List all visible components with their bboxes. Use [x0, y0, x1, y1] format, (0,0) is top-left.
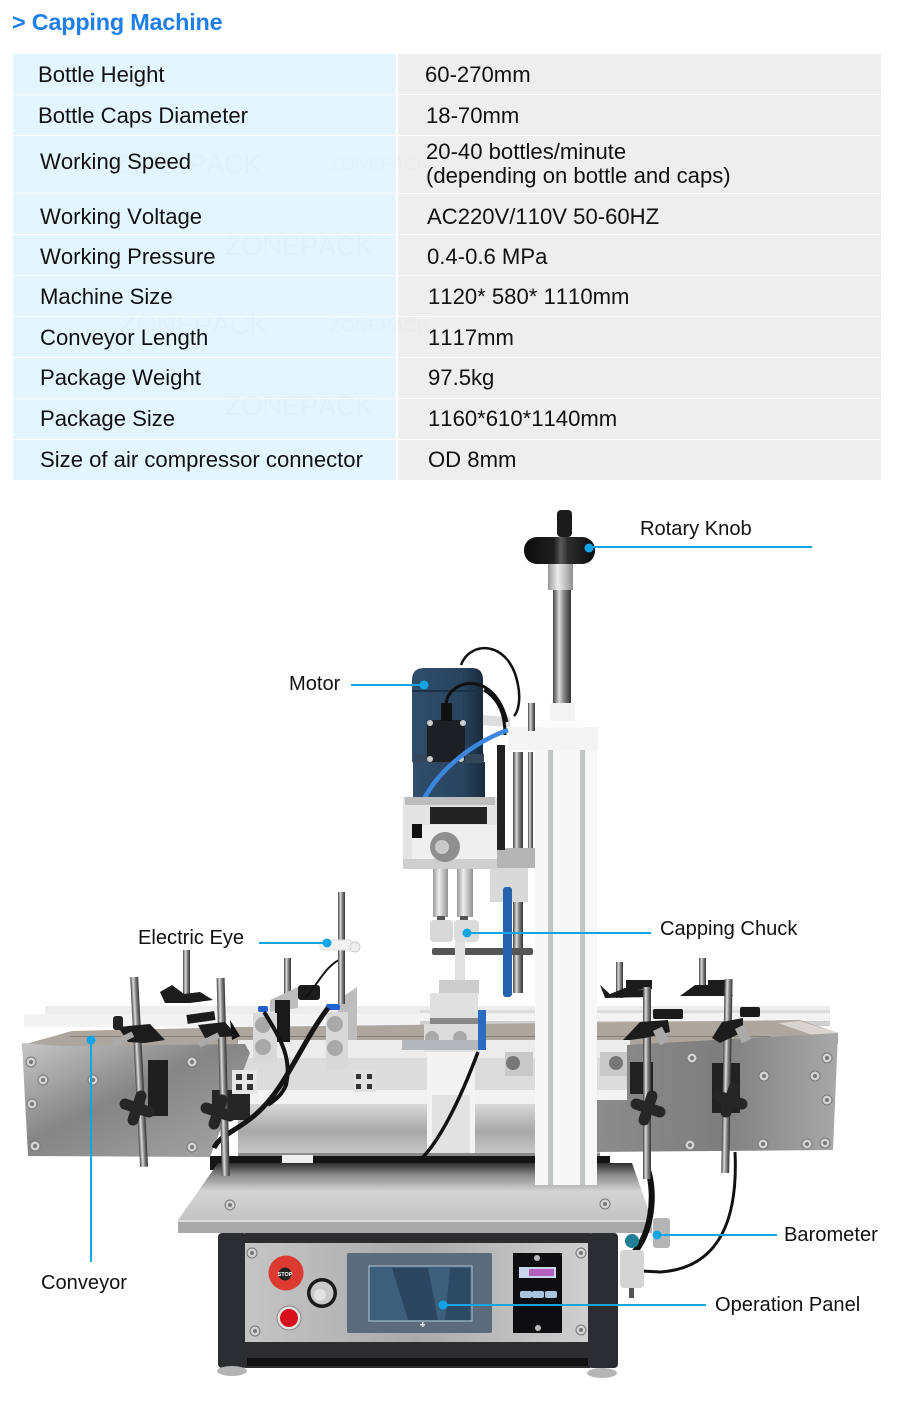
callout: barometer	[652, 1224, 878, 1246]
conveyor belt surface	[22, 1020, 838, 1050]
callout: conveyor: Conveyor	[41, 1272, 127, 1294]
table top	[178, 1163, 652, 1233]
row: working pressure: 0.4-0.6 MPa	[427, 244, 547, 269]
row: machine size: 1120* 580* 1110mm	[428, 284, 629, 309]
motor	[412, 668, 485, 798]
right conveyor side plate	[597, 1033, 838, 1152]
row: working speed: 20-40 bottles/minute	[426, 139, 626, 164]
row: air compressor connector: Size of air compressor connector	[40, 447, 363, 472]
watermark: ZONEPACK	[330, 316, 429, 336]
emergency stop button	[268, 1256, 304, 1290]
row: working speed	[13, 136, 881, 193]
row: package size: Package Size	[40, 406, 175, 431]
row: working pressure	[13, 235, 881, 275]
operation panel	[245, 1243, 588, 1342]
callout: electric eye: Electric Eye	[138, 927, 244, 949]
callout: rotary knob	[584, 518, 812, 552]
callout: barometer: Barometer	[784, 1224, 878, 1246]
back posts and clamps	[160, 950, 733, 1003]
row: bottle caps diameter: 18-70mm	[426, 103, 519, 128]
row: bottle caps diameter: Bottle Caps Diameter	[38, 103, 248, 128]
left adjustable posts	[112, 977, 240, 1176]
title: > Capping Machine	[12, 9, 222, 35]
callout: capping chuck: Capping Chuck	[660, 918, 798, 940]
specification table	[13, 54, 881, 480]
row: package weight: 97.5kg	[428, 365, 494, 390]
back conveyor rails	[24, 1006, 830, 1027]
row: working voltage	[13, 194, 881, 234]
callout: motor	[289, 673, 428, 695]
row: conveyor length: 1117mm	[428, 325, 514, 350]
row: bottle height: Bottle Height	[38, 62, 164, 87]
row: conveyor length	[13, 317, 881, 357]
central conveyor frame	[238, 1040, 630, 1160]
cabinet	[217, 1233, 618, 1378]
callout: operation panel: Operation Panel	[715, 1294, 860, 1316]
watermark: ZONEPACK	[330, 154, 429, 174]
row: working voltage: AC220V/110V 50-60HZ	[427, 204, 659, 229]
watermark: ZONEPACK	[225, 391, 374, 421]
speed dial	[307, 1278, 337, 1308]
air hoses	[214, 958, 343, 1148]
row: working speed: (depending on bottle and caps)	[426, 163, 731, 188]
row: air compressor connector	[13, 440, 881, 480]
watermark: ZONEPACK	[119, 310, 268, 340]
callout: electric eye	[138, 927, 332, 949]
row: package weight: Package Weight	[40, 365, 201, 390]
callout: capping chuck	[462, 918, 798, 940]
guide rods	[432, 703, 535, 997]
barometer and filter	[620, 1152, 735, 1298]
centre bottle guide block	[402, 980, 486, 1158]
motor cables	[416, 648, 519, 825]
row: machine size	[13, 276, 881, 316]
row: conveyor length: Conveyor Length	[40, 325, 208, 350]
callout: operation panel	[438, 1294, 860, 1316]
callout: rotary knob: Rotary Knob	[640, 518, 752, 540]
watermark: ZONEPACK	[225, 231, 374, 261]
row: machine size: Machine Size	[40, 284, 173, 309]
red button	[277, 1306, 301, 1330]
row: working pressure: Working Pressure	[40, 244, 216, 269]
row: air compressor connector: OD 8mm	[428, 447, 516, 472]
dark shadow under conveyor	[210, 1155, 610, 1170]
left pneumatic blocks and extrusions	[232, 987, 376, 1094]
row: bottle height	[13, 54, 881, 94]
row: package size	[13, 399, 881, 439]
pneumatic cylinders and capping chuck	[430, 869, 479, 982]
emergency stop button: STOP	[278, 1272, 293, 1278]
right adjustable posts	[623, 979, 760, 1179]
watermark: ZONEPACK	[113, 149, 262, 179]
touch screen	[347, 1253, 492, 1333]
row: package weight	[13, 358, 881, 398]
capping head	[403, 797, 497, 869]
rotary knob	[524, 510, 595, 703]
column	[509, 703, 598, 1185]
left conveyor side plate	[22, 1043, 250, 1157]
controller display	[513, 1253, 562, 1333]
row: working speed: Working Speed	[40, 149, 191, 174]
electric eye sensor	[320, 892, 360, 1004]
callout: motor: Motor	[289, 673, 341, 695]
row: bottle caps diameter	[13, 95, 881, 135]
row: package size: 1160*610*1140mm	[428, 406, 617, 431]
callout: conveyor	[41, 1036, 127, 1294]
row: working voltage: Working Voltage	[40, 204, 202, 229]
row: bottle height: 60-270mm	[425, 62, 531, 87]
